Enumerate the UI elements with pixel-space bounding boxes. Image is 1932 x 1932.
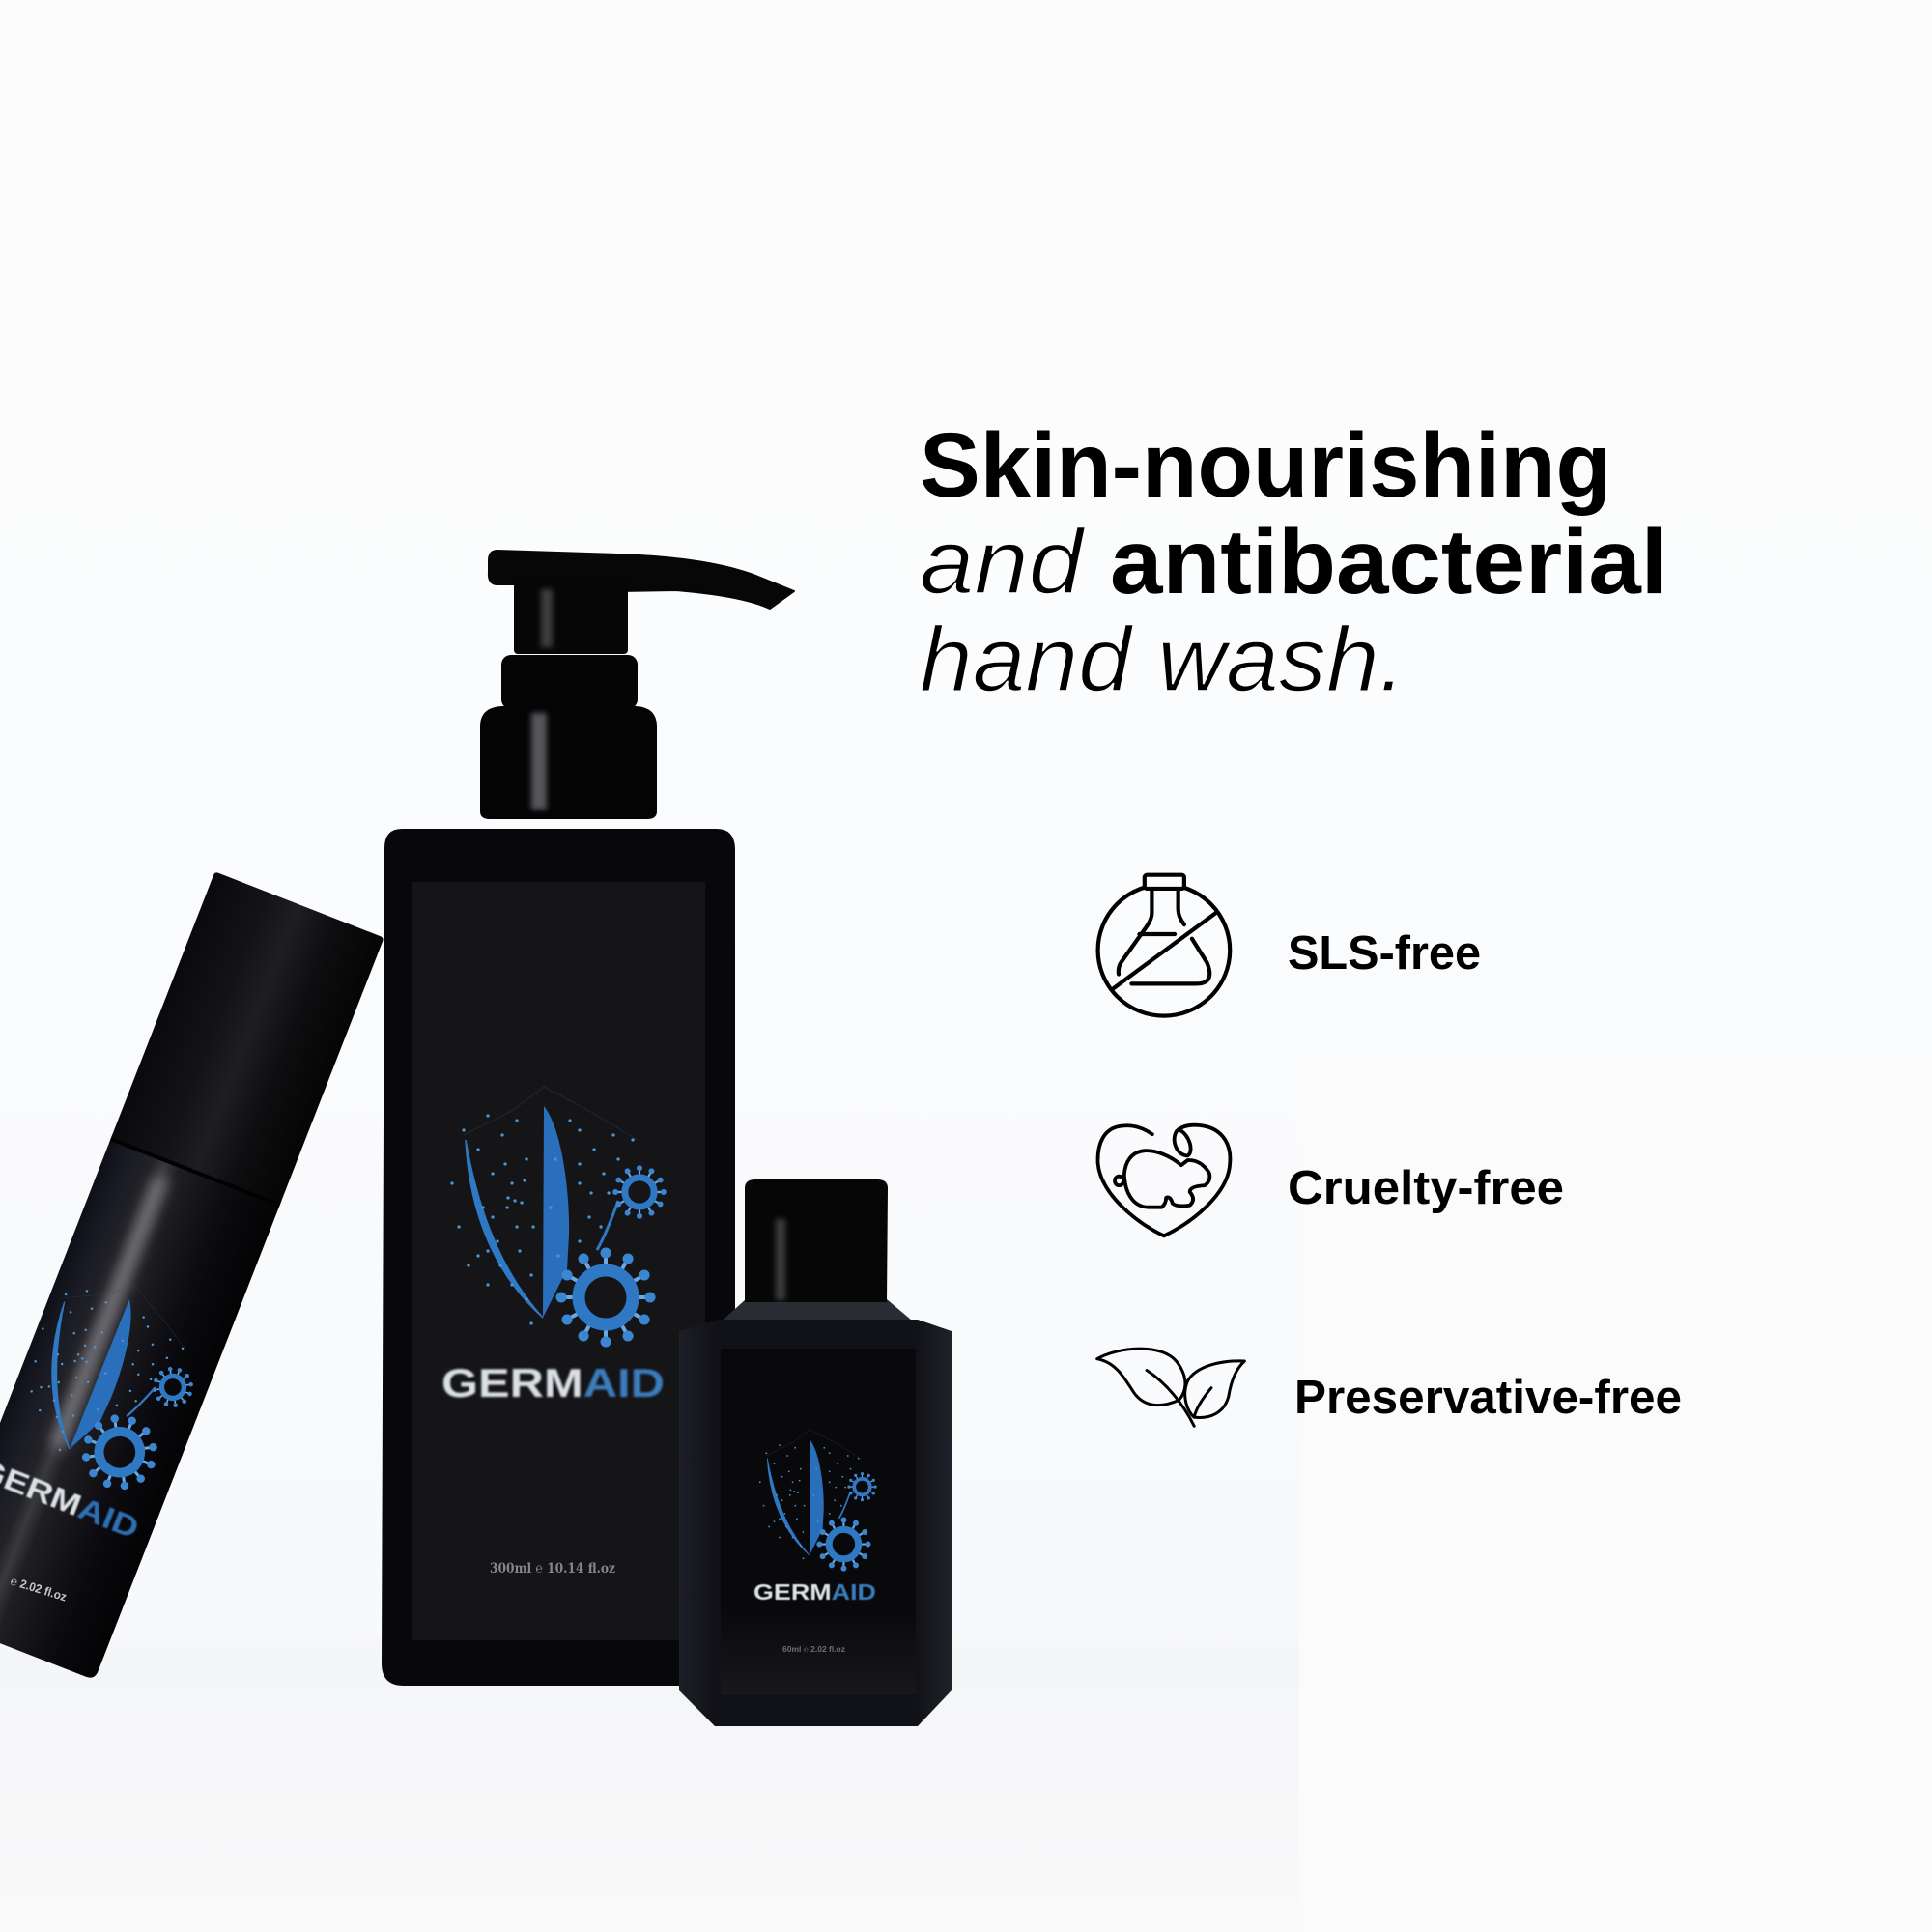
heading <box>920 414 1667 711</box>
brand name: GERM AID <box>441 1360 665 1406</box>
tilted bottle volume text: ℮ 2.02 fl.oz <box>9 1574 69 1604</box>
pump lower collar <box>480 706 657 819</box>
tilted bottle cap <box>111 871 384 1204</box>
label: SLS-free: SLS-free <box>1288 927 1481 980</box>
bottle logo <box>452 1087 664 1342</box>
heading line 1: Skin-nourishing <box>920 414 1611 517</box>
icon: no chemical flask <box>1098 875 1230 1016</box>
label: Cruelty-free: Cruelty-free <box>1288 1162 1564 1214</box>
small bottle cap <box>745 1179 888 1302</box>
tilted spray bottle <box>0 871 384 1680</box>
pump stem highlight <box>541 589 553 647</box>
bottle body <box>382 829 735 1686</box>
heading line 3: hand wash. <box>920 609 1406 711</box>
small flip-cap bottle <box>679 1179 952 1726</box>
small bottle volume text: 60ml ℮ 2.02 fl.oz <box>782 1645 845 1654</box>
icon: cruelty-free rabbit heart <box>1098 1125 1230 1236</box>
background: floor <box>0 1633 1299 1932</box>
small bottle cap highlight <box>776 1219 785 1300</box>
heading line 2 italic: and <box>920 511 1086 613</box>
volume text: 300ml ℮ 10.14 fl.oz <box>490 1561 615 1577</box>
small bottle label <box>721 1349 916 1694</box>
tilted bottle body <box>0 1134 282 1680</box>
small bottle brand name: GERM AID <box>753 1579 876 1605</box>
pump upper collar <box>501 655 638 709</box>
pump stem <box>514 582 628 654</box>
bottle label <box>412 882 705 1640</box>
tilted bottle highlight <box>49 1175 169 1450</box>
background: right panel <box>1299 1063 1932 1932</box>
icon: leaves <box>1097 1349 1244 1426</box>
small bottle neck <box>717 1299 918 1325</box>
large pump bottle <box>382 551 794 1686</box>
small bottle logo <box>760 1430 875 1569</box>
heading line 2 bold: antibacterial <box>1110 511 1667 613</box>
pump head <box>489 551 794 609</box>
tilted bottle seam <box>110 1137 280 1207</box>
label: Preservative-free: Preservative-free <box>1294 1372 1682 1424</box>
collar highlight <box>531 713 547 810</box>
tilted bottle logo <box>0 1258 220 1546</box>
small bottle body <box>679 1320 952 1726</box>
